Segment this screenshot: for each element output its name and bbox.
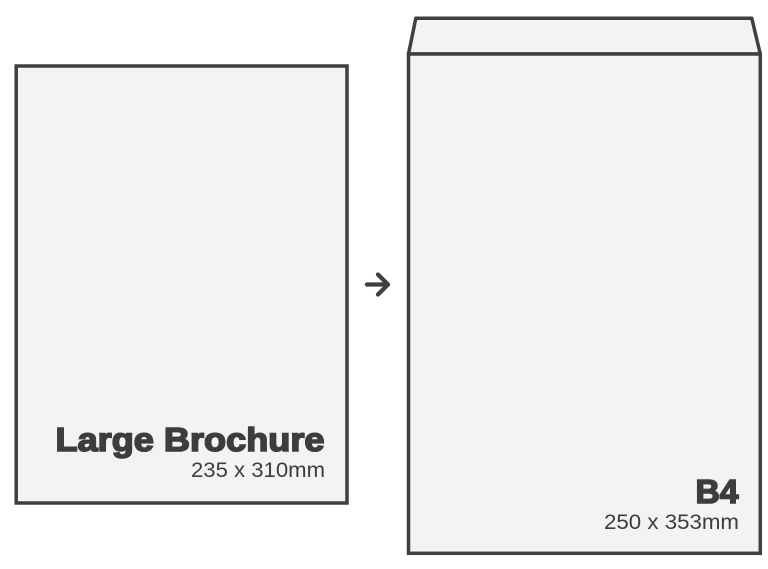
envelope flap [408, 18, 760, 54]
brochure sheet [16, 66, 347, 503]
heading: large brochure: Large Brochure [56, 421, 324, 458]
panel: large brochure [16, 66, 347, 503]
panel: B4 envelope [408, 18, 760, 553]
dimensions: B4: 250 x 353mm [604, 511, 739, 534]
heading: B4: B4 [696, 473, 739, 510]
dimensions: large brochure: 235 x 310mm [191, 459, 325, 482]
arrow [367, 274, 388, 294]
envelope body [408, 54, 760, 553]
